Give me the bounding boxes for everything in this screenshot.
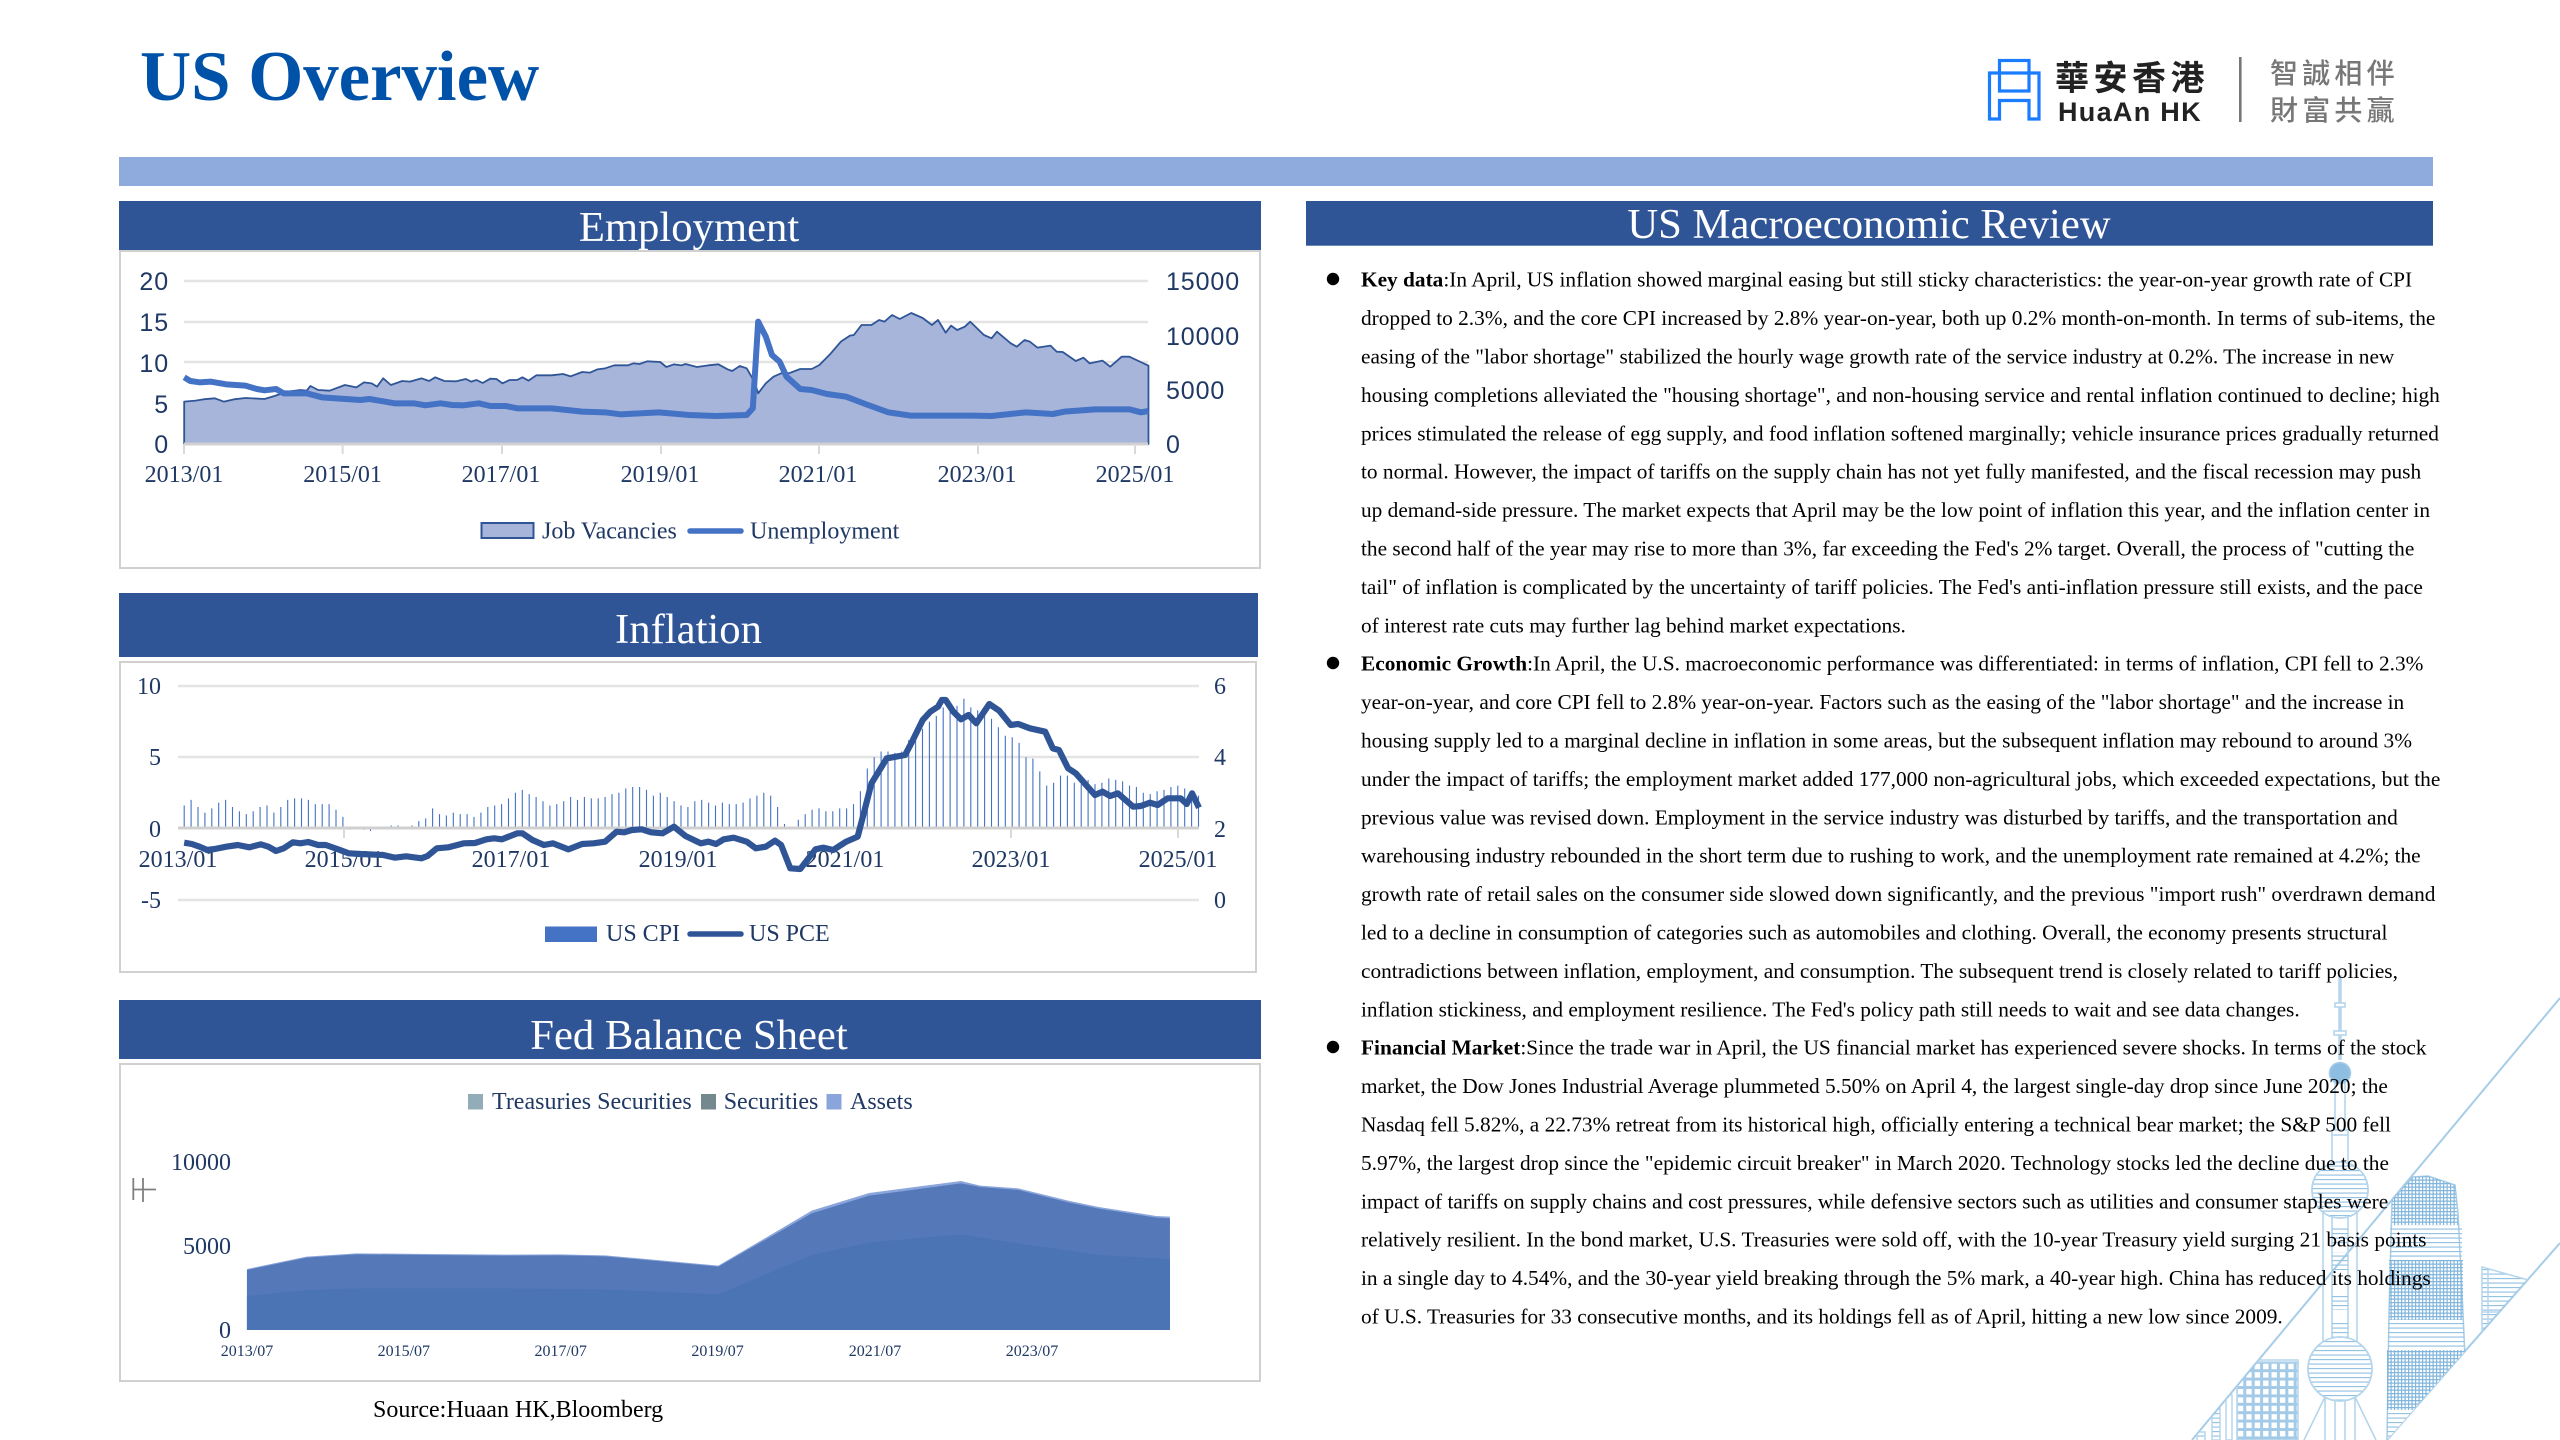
title: US Overview [140, 38, 539, 116]
logo: HuaAn HK [1990, 51, 2399, 129]
left y axis labels: 5 [154, 391, 169, 419]
heading: Inflation [119, 593, 1258, 657]
text block: Economic Growth [1327, 652, 2440, 1021]
logo divider [2239, 57, 2242, 122]
area: assets [247, 1181, 1170, 1330]
employment chart [139, 268, 1240, 544]
y axis labels: 5000 [183, 1234, 231, 1260]
x axis labels: 2019/01 [621, 462, 699, 488]
text block: Key data: up demand-side pressure. The market expects that April may be the low point of inflation this year, and the inflation center in [1361, 498, 2430, 522]
text block: Financial Market: of U.S. Treasuries for 33 consecutive months, and its holdings fell as of April, hitting a new low since 2009. [1361, 1304, 2283, 1328]
line: US PCE [184, 700, 1199, 869]
legend: US PCE [749, 921, 830, 947]
text block: Key data: easing of the "labor shortage" stabilized the hourly wage growth rate of the service industry at 0.2%. The increase in new [1361, 344, 2395, 368]
text block: Key data: to normal. However, the impact of tariffs on the supply chain has not yet fully manifested, and the fiscal recession may push [1361, 460, 2421, 484]
text block: Financial Market: 5.97%, the largest drop since the "epidemic circuit breaker" in March 2020. Technology stocks led the decline due to the [1361, 1151, 2389, 1175]
text block: Economic Growth: led to a decline in consumption of categories such as automobiles and clothing. Overall, the economy presents structural [1361, 920, 2388, 944]
chart frame [120, 1064, 1260, 1381]
text block: Economic Growth: housing supply led to a marginal decline in inflation in some areas, but the subsequent inflation may rebound to around 3% [1361, 728, 2412, 752]
logo slogan: 智誠相伴 [2270, 52, 2399, 92]
text block: Economic Growth: year-on-year, and core CPI fell to 2.8% year-on-year. Factors such as the easing of the "labor shortage" and the increase in [1361, 690, 2405, 714]
legend: Securities [724, 1089, 818, 1115]
logo wordmark: 華安香港 [2055, 51, 2209, 100]
left y axis labels: 15 [139, 309, 169, 337]
fed balance sheet chart [133, 1089, 1170, 1360]
legend [482, 518, 900, 544]
text block: Key data: dropped to 2.3%, and the core CPI increased by 2.8% year-on-year, both up 0.2% month-on-month. In terms of sub-items, the [1361, 306, 2435, 330]
x axis labels: 2017/01 [472, 847, 550, 873]
right y axis labels: 0 [1214, 888, 1226, 914]
right y axis labels: 10000 [1166, 323, 1240, 351]
area: treasuries securities [247, 1234, 1170, 1330]
left y axis labels: 0 [154, 431, 169, 459]
inflation chart [137, 674, 1226, 947]
heading: Inflation: Inflation [615, 606, 762, 653]
text block: Key data: the second half of the year may rise to more than 3%, far exceeding the Fed's 2% target. Overall, the process of "cutting the [1361, 536, 2414, 560]
left y axis labels: -5 [141, 888, 161, 914]
text block: Financial Market: market, the Dow Jones Industrial Average plummeted 5.50% on April 4, the largest single-day drop since June 2020; the [1361, 1074, 2388, 1098]
x axis labels: 2015/01 [305, 847, 383, 873]
text block: Financial Market [1327, 1036, 2431, 1328]
text block: Financial Market: in a single day to 4.54%, and the 30-year yield breaking through the 5% mark, a 40-year high. China has reduced its holdings [1361, 1266, 2431, 1290]
text block: Economic Growth: previous value was revised down. Employment in the service industry was disturbed by tariffs, and the transportation and [1361, 805, 2398, 829]
legend: Assets [850, 1089, 913, 1115]
x axis labels: 2017/07 [534, 1343, 587, 1360]
right y axis labels: 2 [1214, 817, 1226, 843]
left y axis labels: 20 [139, 268, 169, 296]
panel: Employment [119, 201, 1261, 568]
x axis labels: 2021/01 [779, 462, 857, 488]
right y axis labels: 0 [1166, 431, 1181, 459]
text block: Economic Growth: under the impact of tariffs; the employment market added 177,000 non-agricultural jobs, which exceeded expectations, but the [1361, 767, 2440, 791]
logo wordmark: HuaAn HK [2058, 97, 2202, 127]
x axis labels [139, 847, 1217, 873]
heading: US Macroeconomic Review [1306, 201, 2433, 248]
right y axis labels [1214, 674, 1226, 914]
heading: US Macroeconomic Review: US Macroeconomic Review [1627, 201, 2111, 248]
bars: US CPI [184, 699, 1198, 831]
watermark: Shanghai skyline [2192, 975, 2560, 1440]
x axis labels: 2025/01 [1139, 847, 1217, 873]
chart frame [120, 662, 1256, 972]
heading: Employment: Employment [579, 204, 799, 251]
left y axis labels [137, 674, 161, 914]
heading: Fed Balance Sheet: Fed Balance Sheet [530, 1012, 848, 1059]
right y axis labels [1166, 268, 1240, 459]
panel: US Macroeconomic Review [1306, 201, 2440, 1328]
panel: Inflation [119, 593, 1258, 972]
x axis labels: 2013/01 [139, 847, 217, 873]
x axis labels: 2019/07 [691, 1343, 744, 1360]
text block: Economic Growth: inflation stickiness, and employment resilience. The Fed's policy path still needs to wait and see data changes. [1361, 997, 2300, 1021]
x axis labels: 2013/01 [145, 462, 223, 488]
text block: Financial Market: relatively resilient. In the bond market, U.S. Treasuries were sold off, with the 10-year Treasury yield surging 21 basis points [1361, 1228, 2426, 1252]
legend: Job Vacancies [542, 518, 677, 544]
heading: Fed Balance Sheet [119, 1000, 1261, 1059]
x axis ticks [184, 444, 1148, 454]
x axis labels [145, 462, 1174, 488]
y axis labels: 0 [219, 1318, 231, 1344]
left y axis labels [139, 268, 169, 459]
legend [545, 921, 830, 947]
text block: Economic Growth: Economic Growth:In April, the U.S. macroeconomic performance was differentiated: in terms of inflation, CPI fell to 2.3% [1361, 652, 2424, 676]
legend: Treasuries Securities [492, 1089, 692, 1115]
left y axis labels: 0 [149, 817, 161, 843]
text block: Financial Market: Nasdaq fell 5.82%, a 22.73% retreat from its historical high, officially entering a technical bear market; the S&P 500 fell [1361, 1112, 2391, 1136]
right y axis labels: 5000 [1166, 377, 1225, 405]
x axis labels: 2023/01 [938, 462, 1016, 488]
x axis line and ticks [178, 828, 1199, 838]
text block: Key data: of interest rate cuts may further lag behind market expectations. [1361, 613, 1906, 637]
legend: Unemployment [750, 518, 900, 544]
unit glyph [133, 1178, 156, 1202]
chart frame [120, 251, 1260, 568]
y axis labels [171, 1150, 231, 1344]
logo slogan [2270, 52, 2399, 129]
y axis labels: 10000 [171, 1150, 231, 1176]
text block: Economic Growth: warehousing industry rebounded in the short term due to rushing to work, and the unemployment rate remained at 4.2%; the [1361, 844, 2421, 868]
line: unemployment [184, 322, 1148, 416]
x axis labels: 2017/01 [462, 462, 540, 488]
x axis labels: 2019/01 [639, 847, 717, 873]
x axis labels: 2025/01 [1096, 462, 1174, 488]
top band [119, 157, 2433, 186]
panel: Fed Balance Sheet [119, 1000, 1261, 1381]
x axis labels: 2015/07 [378, 1343, 430, 1360]
left y axis labels: 10 [137, 674, 161, 700]
x axis labels: 2015/01 [303, 462, 382, 488]
text block: Key data: prices stimulated the release of egg supply, and food inflation softened marginally; vehicle insurance prices gradually returned [1361, 421, 2439, 445]
heading: Employment [119, 201, 1261, 251]
text block: Key data: tail" of inflation is complicated by the uncertainty of tariff policies. The Fed's anti-inflation pressure still exists, and the pace [1361, 575, 2423, 599]
text block: Financial Market: impact of tariffs on supply chains and cost pressures, while defensive sectors such as utilities and consumer staples were [1361, 1189, 2388, 1213]
x axis labels: 2021/07 [849, 1343, 901, 1360]
left y axis labels: 10 [139, 350, 169, 378]
x axis labels: 2023/07 [1006, 1343, 1058, 1360]
x axis labels: 2023/01 [972, 847, 1050, 873]
text block: Key data: housing completions alleviated the "housing shortage", and non-housing service and rental inflation continued to decline; high [1361, 383, 2440, 407]
left y axis labels: 5 [149, 745, 161, 771]
legend [468, 1089, 913, 1115]
icon: HuaAn mark [1990, 60, 2039, 119]
x axis labels [221, 1343, 1058, 1360]
area: securities [247, 1183, 1170, 1330]
source note: Source:Huaan HK,Bloomberg [373, 1397, 663, 1423]
text block: Economic Growth: contradictions between inflation, employment, and consumption. The subsequent trend is closely related to tariff policies, [1361, 959, 2398, 983]
logo slogan: 財富共贏 [2270, 89, 2399, 129]
right y axis labels: 15000 [1166, 268, 1240, 296]
right y axis labels: 4 [1214, 745, 1226, 771]
text block: Financial Market: Financial Market:Since the trade war in April, the US financial market has experienced severe shocks. In terms of the stock [1361, 1036, 2427, 1060]
x axis labels: 2013/07 [221, 1343, 273, 1360]
text block: Economic Growth: growth rate of retail sales on the consumer side slowed down significantly, and the previous "import rush" overdrawn demand [1361, 882, 2436, 906]
logo wordmark [2055, 51, 2209, 127]
text block: Key data [1327, 268, 2440, 637]
legend: US CPI [606, 921, 680, 947]
right y axis labels: 6 [1214, 674, 1226, 700]
x axis labels: 2021/01 [806, 847, 884, 873]
text block: Key data: Key data:In April, US inflation showed marginal easing but still sticky characteristics: the year-on-year growth rate of CPI [1361, 268, 2412, 292]
area: job vacancies [184, 313, 1148, 444]
